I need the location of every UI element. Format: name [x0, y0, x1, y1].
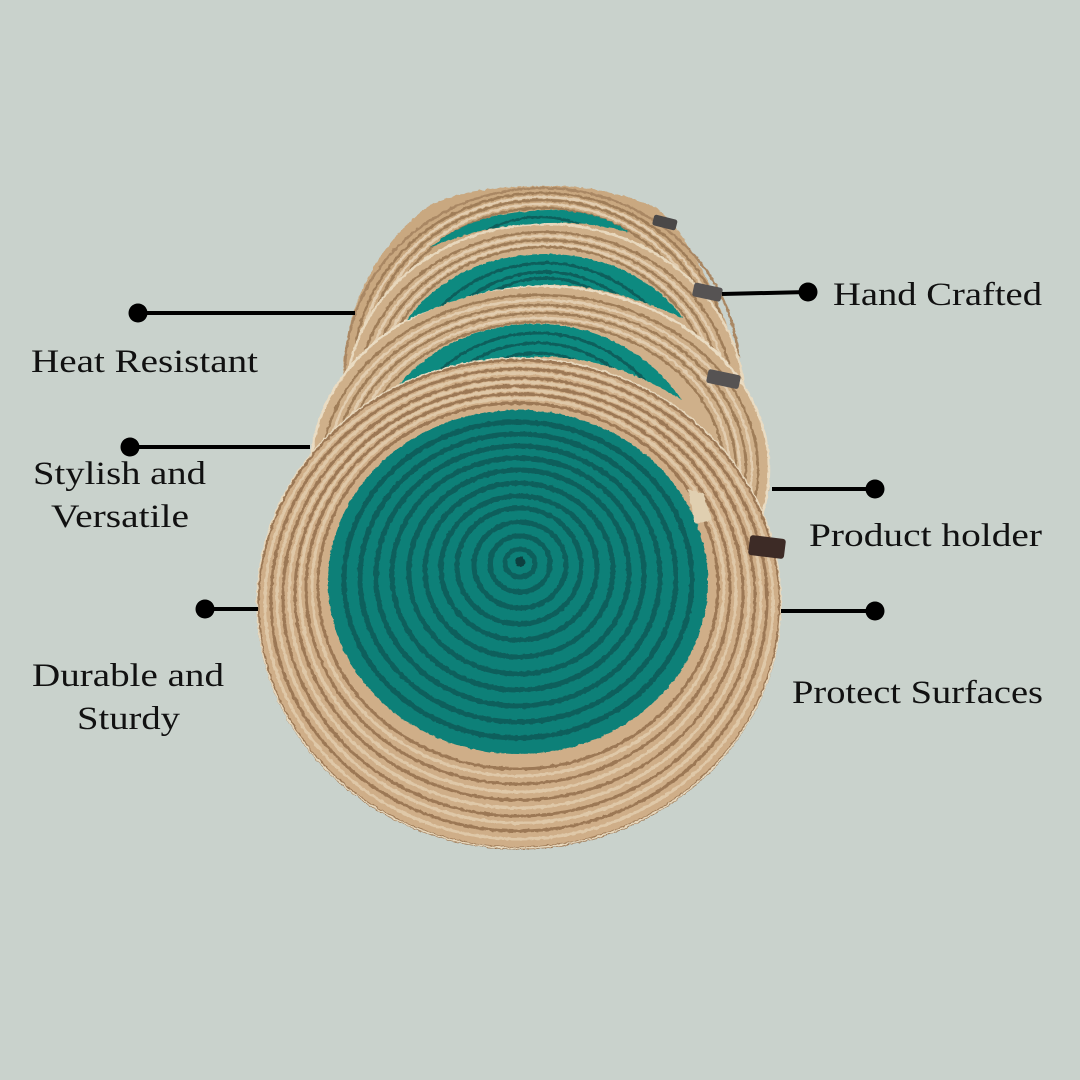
placemat 3 jute: [345, 223, 745, 577]
teal centre: [328, 410, 708, 754]
callout: Durable and Sturdy: Durable and: [32, 658, 225, 694]
callout: Stylish and Versatile: [33, 438, 310, 535]
jute border: [257, 358, 781, 849]
tag 4: [652, 214, 678, 231]
callout: Heat Resistant: [31, 304, 355, 380]
callout: Durable and Sturdy: [32, 600, 258, 737]
teal crescent 3: [407, 253, 683, 320]
back silhouette: [343, 186, 770, 600]
placemat 1 (front): [257, 358, 781, 849]
tag 2: [706, 369, 741, 389]
jute patch on teal edge: [688, 489, 712, 524]
callout: Hand Crafted: [722, 277, 1043, 313]
teal crescent 2: [399, 324, 682, 400]
callout: Durable and Sturdy: Sturdy: [77, 701, 181, 737]
callout: Stylish and Versatile: Versatile: [51, 499, 189, 535]
placemat 4 (back) jute: [345, 188, 739, 556]
callout: Product holder: Product holder: [809, 518, 1042, 554]
callout: Product holder: [772, 480, 1042, 554]
callout: Protect Surfaces: Protect Surfaces: [792, 675, 1043, 711]
callout: Heat Resistant: Heat Resistant: [31, 344, 258, 380]
callout: Hand Crafted: Hand Crafted: [833, 277, 1043, 313]
placemat 2 jute: [310, 285, 770, 655]
callout: Stylish and Versatile: Stylish and: [33, 456, 207, 492]
teal crescent 4: [430, 210, 628, 248]
tag 3: [692, 282, 723, 302]
placemat stack: [257, 186, 781, 849]
tag 1 product holder: [748, 535, 786, 559]
infographic canvas: [32, 186, 1042, 850]
callout: Protect Surfaces: [781, 602, 1043, 711]
